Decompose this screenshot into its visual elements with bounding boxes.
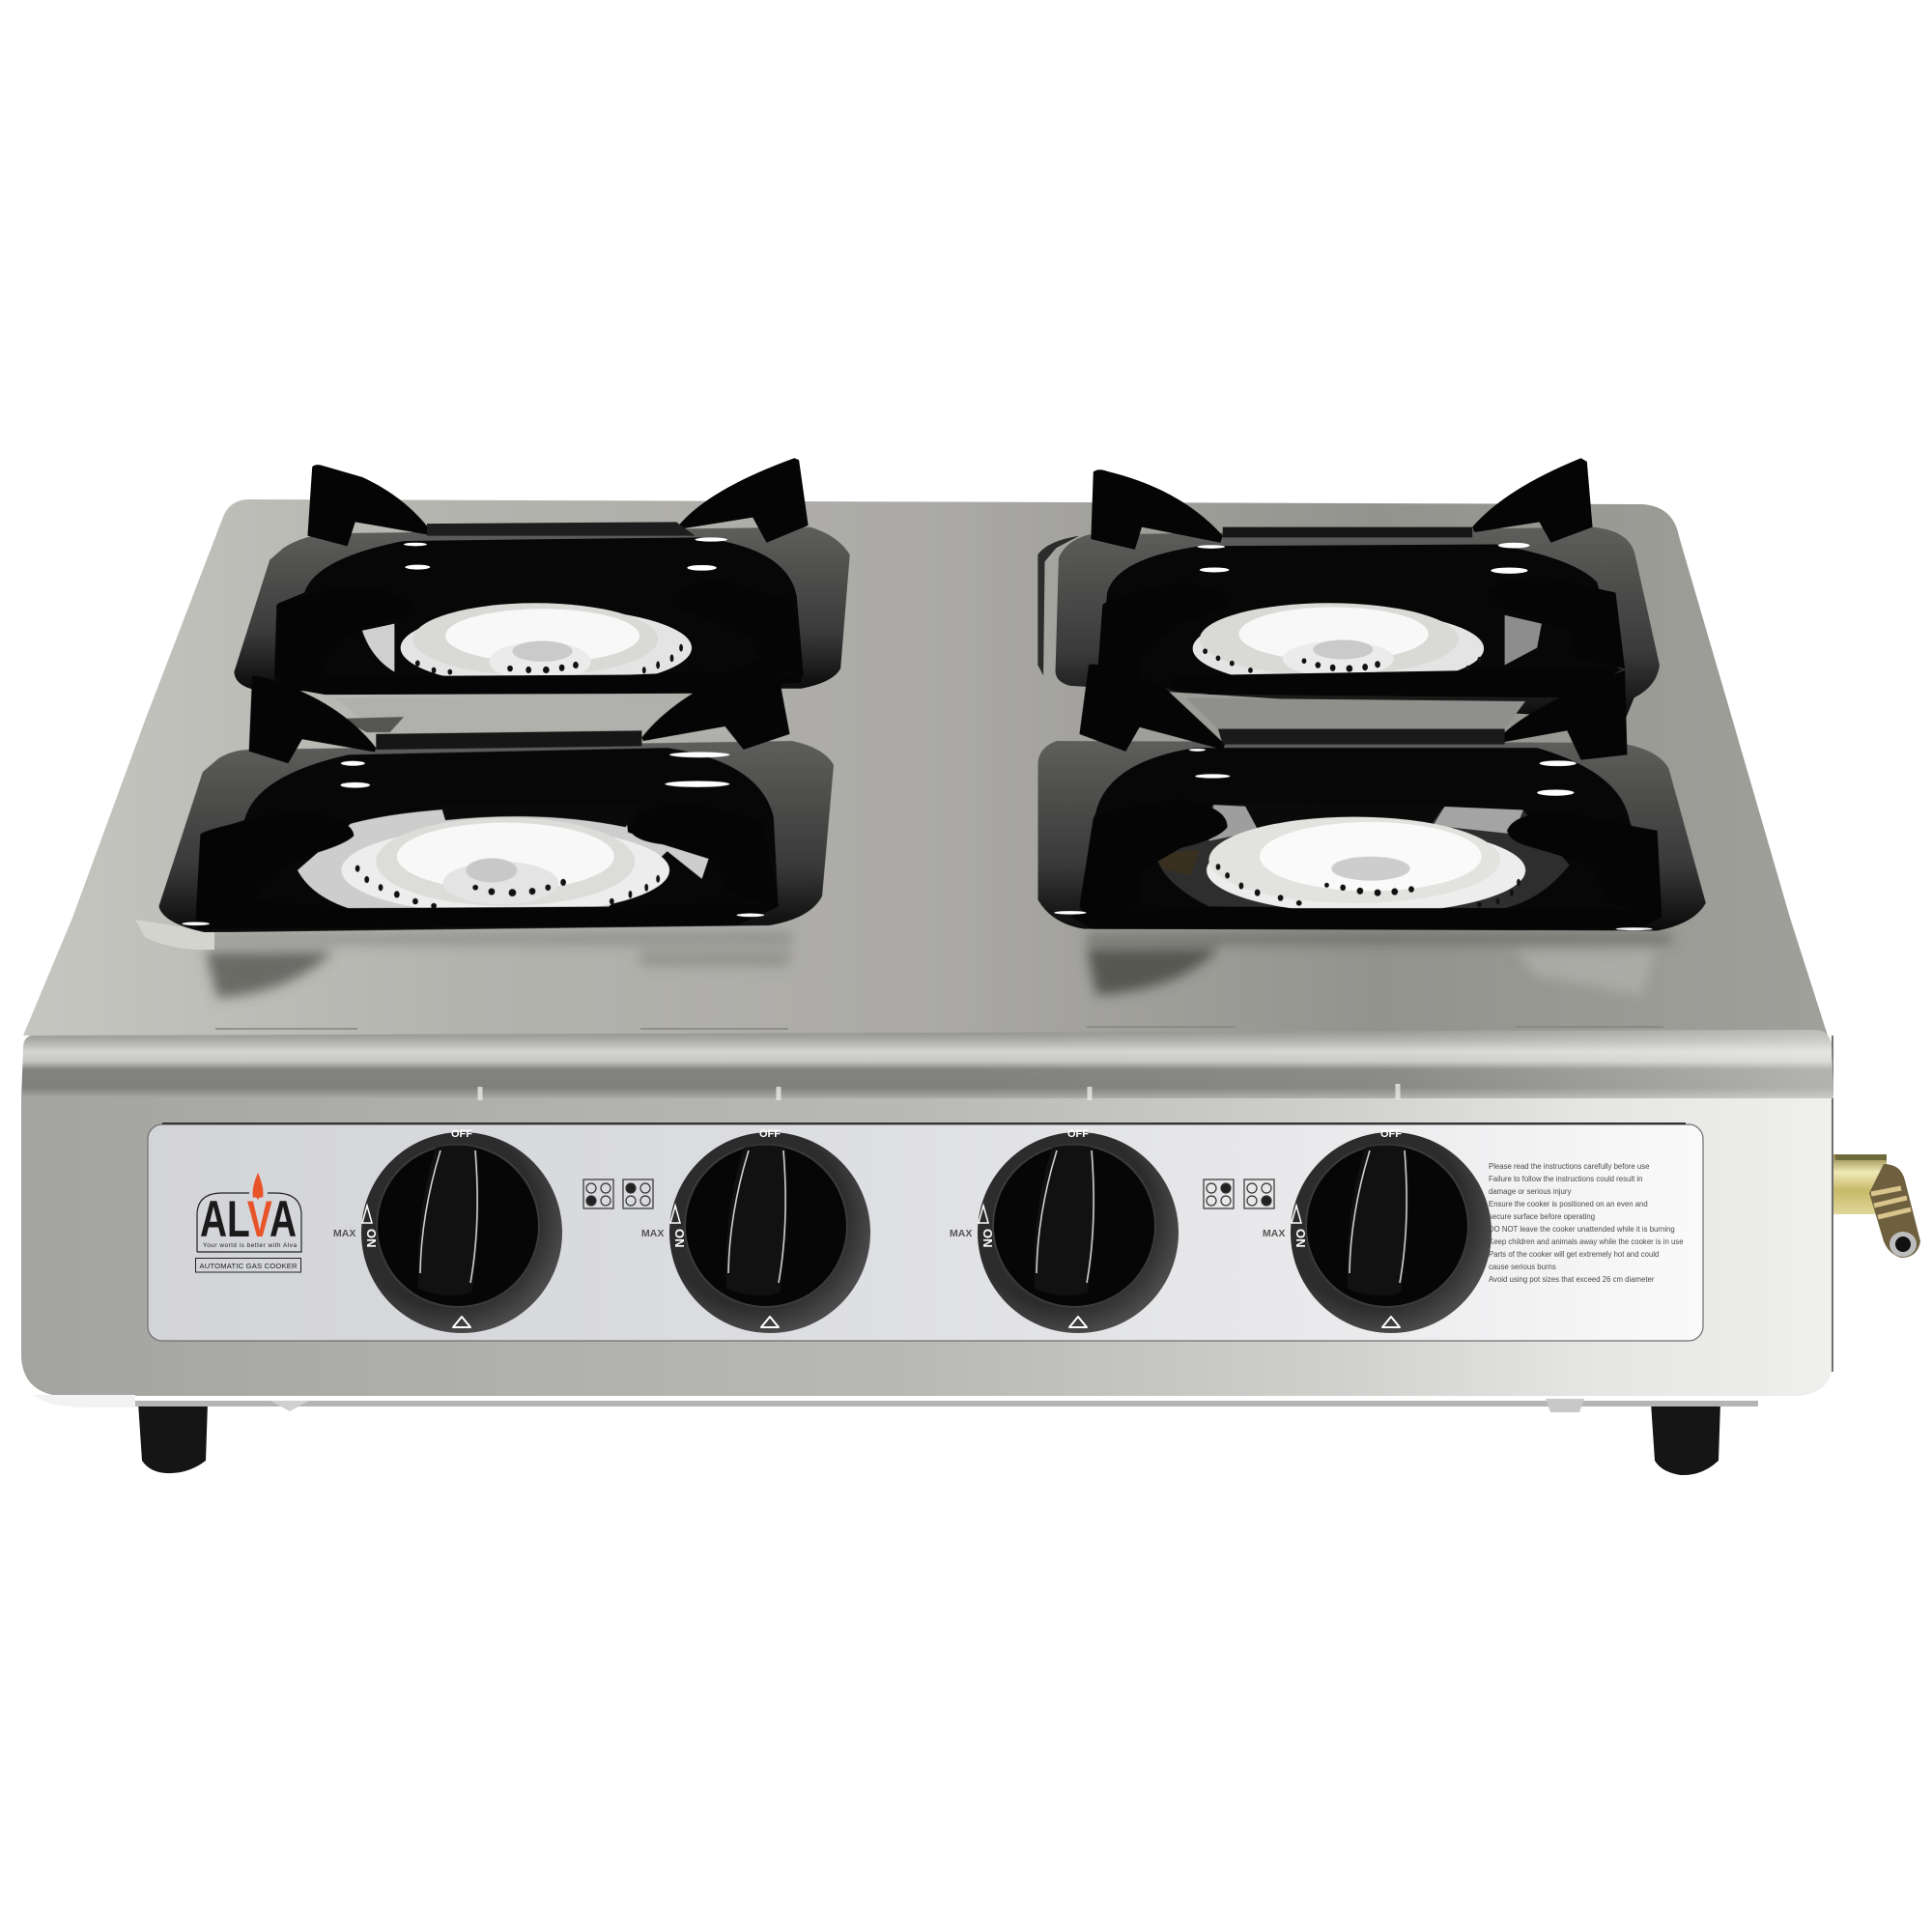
safety instructions text: secure surface before operating <box>1489 1212 1595 1221</box>
safety instructions text: Ensure the cooker is positioned on an even and <box>1489 1200 1648 1208</box>
control panel <box>148 1123 1703 1341</box>
safety instructions text: Failure to follow the instructions could result in <box>1489 1175 1642 1183</box>
opening around the burner <box>1158 805 1570 908</box>
control knob 3: ON <box>980 1229 995 1248</box>
control knob 2: ON <box>672 1229 687 1248</box>
safety instructions text: DO NOT leave the cooker unattended while it is burning <box>1489 1225 1675 1234</box>
highlights <box>182 752 764 925</box>
safety instructions text <box>1489 1162 1684 1284</box>
well <box>274 537 804 691</box>
logo: Alva <box>195 1173 301 1272</box>
highlights <box>404 537 727 571</box>
safety instructions text: damage or serious injury <box>1489 1187 1571 1196</box>
tray <box>1056 527 1660 721</box>
burner head <box>341 817 669 915</box>
burner: front right <box>1037 665 1706 930</box>
right edge line <box>1832 1036 1833 1372</box>
control knob 1: MAX <box>333 1228 355 1239</box>
product label: AUTOMATIC GAS COOKER <box>199 1262 298 1270</box>
icon: rear left indicator <box>623 1179 653 1208</box>
control knob 1: OFF <box>451 1128 472 1140</box>
plate showing behind the grate <box>334 697 787 734</box>
burner: front left <box>158 658 834 932</box>
control knob 4 <box>1263 1128 1492 1333</box>
icon: front left indicator <box>583 1179 613 1208</box>
side plate <box>1037 536 1079 675</box>
control knob 4: ON <box>1293 1229 1308 1248</box>
control knob 3: OFF <box>1067 1128 1089 1140</box>
cooktop surface <box>23 499 1828 1036</box>
control knob 2 <box>641 1128 870 1333</box>
icon: front right indicator <box>1244 1179 1274 1208</box>
control knob 1 <box>333 1128 562 1333</box>
burner head <box>1193 603 1484 687</box>
control knob 3: MAX <box>950 1228 972 1239</box>
safety instructions text: Parts of the cooker will get extremely hot and could <box>1489 1250 1659 1259</box>
plate showing behind the grate <box>1185 697 1525 729</box>
highlights <box>1054 749 1653 930</box>
tagline: Your world is better with Alva <box>203 1242 297 1249</box>
grate <box>274 458 809 695</box>
tray <box>234 527 850 690</box>
safety instructions text: Avoid using pot sizes that exceed 26 cm diameter <box>1489 1275 1655 1284</box>
control knob 2: MAX <box>641 1228 664 1239</box>
bottom rail <box>135 1401 1758 1406</box>
burner head <box>401 603 692 688</box>
wordmark: ALVA <box>200 1191 297 1248</box>
grate <box>196 658 790 929</box>
bent front edge <box>21 1030 1833 1100</box>
opening around the burner <box>362 624 394 672</box>
gas inlet fitting <box>1833 1154 1920 1258</box>
safety instructions text: Keep children and animals away while the cooker is in use <box>1489 1237 1684 1246</box>
icon: rear right indicator <box>1204 1179 1234 1208</box>
front body <box>21 1036 1833 1412</box>
opening around the burner <box>1505 615 1542 665</box>
flame <box>253 1173 263 1200</box>
well <box>196 748 779 929</box>
safety instructions text: Please read the instructions carefully before use <box>1489 1162 1649 1171</box>
control knob 3 <box>950 1128 1179 1333</box>
opening around the burner <box>298 807 709 908</box>
tray <box>1037 741 1706 930</box>
control knob 2: OFF <box>759 1128 781 1140</box>
grate <box>1091 458 1625 697</box>
well <box>1100 545 1618 696</box>
safety instructions text: cause serious burns <box>1489 1263 1556 1271</box>
highlights <box>1197 543 1529 574</box>
grate <box>1070 665 1662 929</box>
burner: rear left <box>234 458 850 695</box>
foot: left <box>138 1403 208 1473</box>
control knob 4: OFF <box>1380 1128 1402 1140</box>
burner indicator icons <box>583 1179 1274 1208</box>
burner head <box>1207 817 1525 914</box>
tray <box>158 741 834 932</box>
foot: right <box>1651 1403 1720 1475</box>
control knob 4: MAX <box>1263 1228 1285 1239</box>
control knob 1: ON <box>364 1229 379 1248</box>
arch frame <box>197 1193 301 1252</box>
burner: rear right <box>1037 458 1660 721</box>
well <box>1079 748 1662 929</box>
